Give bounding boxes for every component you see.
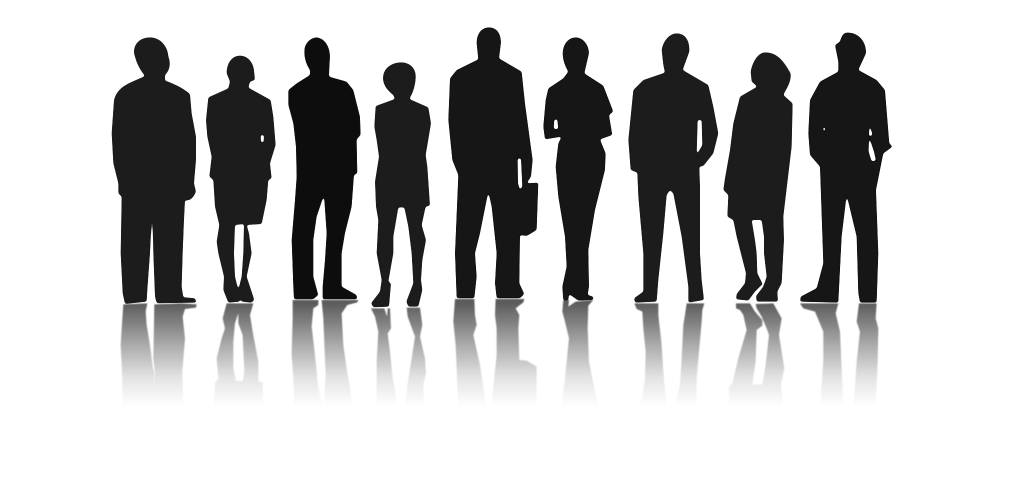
floor reflections — [121, 299, 878, 408]
silhouette: man 9 looking up — [800, 33, 893, 303]
silhouette: man 1 — [112, 37, 197, 304]
reflection: people 4 to 6 — [371, 299, 599, 408]
silhouette: woman 8 in dress — [723, 52, 793, 302]
silhouette: woman 6 in trousers — [543, 37, 613, 301]
silhouette: man 5 with briefcase — [448, 27, 538, 298]
silhouette: woman 4 in short skirt — [371, 62, 431, 307]
silhouette: man 3 with crossed arms — [288, 37, 361, 299]
group of people silhouettes — [112, 27, 893, 307]
reflection: people 7 to 9 — [634, 303, 878, 408]
silhouette: woman 2 in skirt — [206, 56, 276, 303]
reflection: people 1 to 3 — [121, 300, 358, 408]
silhouette: man 7 — [628, 33, 718, 303]
